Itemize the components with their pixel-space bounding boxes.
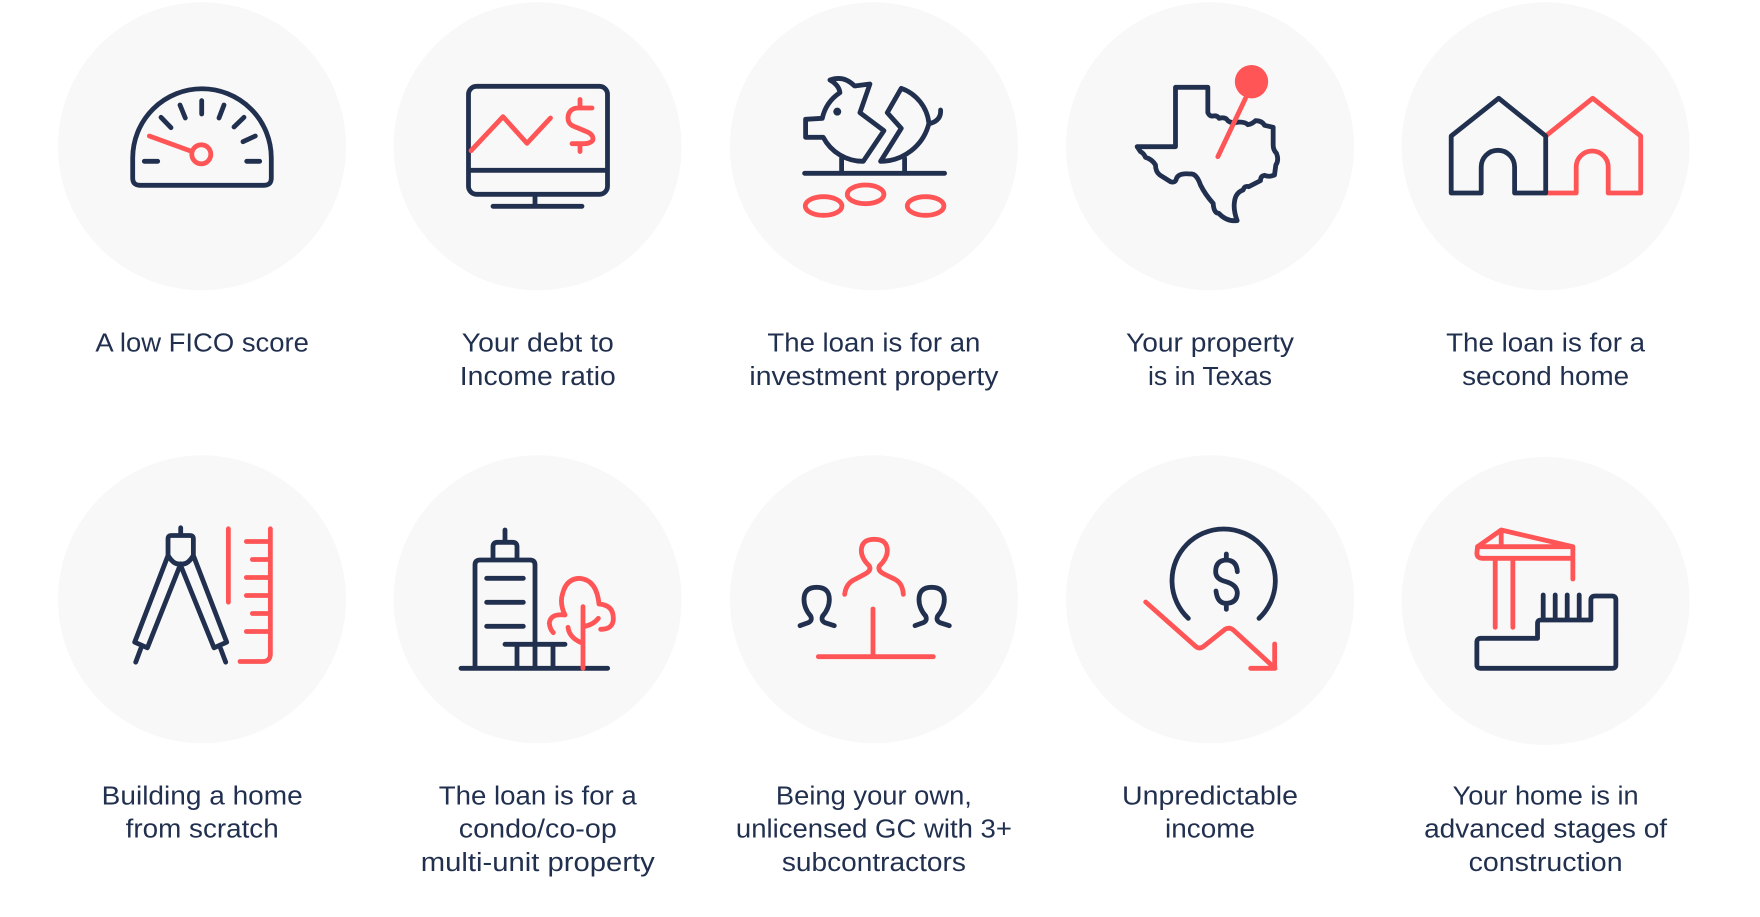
- icon: monitor with chart: [468, 86, 608, 206]
- label: Building a home: [102, 783, 303, 811]
- icon: three people: [800, 539, 949, 657]
- background circle: [58, 2, 346, 290]
- panel: advanced stages of construction: [1402, 457, 1690, 877]
- icon: broken piggy bank: [805, 78, 945, 215]
- label: [736, 783, 1012, 877]
- icon: tower and tree: [461, 530, 613, 668]
- label: multi-unit property: [421, 849, 655, 877]
- panel: low FICO score: [58, 2, 346, 358]
- label: [1446, 330, 1646, 391]
- label: Income ratio: [460, 363, 616, 391]
- panel: debt to income ratio: [394, 2, 682, 391]
- panel: investment property: [730, 2, 1018, 391]
- panel: second home: [1402, 2, 1690, 391]
- label: The loan is for a: [439, 783, 638, 811]
- label: income: [1165, 816, 1255, 844]
- label: The loan is for an: [767, 330, 980, 358]
- label: [1126, 330, 1294, 391]
- label: [460, 330, 616, 391]
- icon: crane and building: [1477, 530, 1616, 668]
- label: Unpredictable: [1122, 783, 1298, 811]
- label: A low FICO score: [95, 330, 309, 358]
- label: second home: [1462, 363, 1629, 391]
- label: [749, 330, 999, 391]
- icon: two houses: [1451, 98, 1641, 193]
- panel: property in Texas: [1066, 2, 1354, 391]
- label: Being your own,: [776, 783, 972, 811]
- background circle: [730, 2, 1018, 290]
- background circle: [1402, 2, 1690, 290]
- background circle: [394, 455, 682, 743]
- label: from scratch: [126, 816, 279, 844]
- label: [1424, 783, 1668, 877]
- panel: condo multi-unit property: [394, 455, 682, 877]
- label: investment property: [749, 363, 999, 391]
- label: Your home is in: [1453, 783, 1639, 811]
- background circle: [1066, 2, 1354, 290]
- panel: unlicensed GC: [730, 455, 1018, 877]
- label: advanced stages of: [1424, 816, 1668, 844]
- background circle: [394, 2, 682, 290]
- icon: Texas map with pin: [1137, 65, 1278, 221]
- panel: building from scratch: [58, 455, 346, 844]
- label: Your property: [1126, 330, 1294, 358]
- icon: falling income arrow: [1146, 529, 1275, 668]
- panel: unpredictable income: [1066, 455, 1354, 844]
- label: [102, 783, 303, 844]
- icon: speedometer gauge: [133, 89, 271, 185]
- label: The loan is for a: [1446, 330, 1646, 358]
- label: subcontractors: [782, 849, 966, 877]
- label: construction: [1469, 849, 1623, 877]
- label: unlicensed GC with 3+: [736, 816, 1012, 844]
- background circle: [1066, 455, 1354, 743]
- background circle: [730, 455, 1018, 743]
- icon: compass and ruler: [135, 528, 270, 662]
- label: [1122, 783, 1298, 844]
- background circle: [58, 455, 346, 743]
- label: Your debt to: [462, 330, 614, 358]
- label: is in Texas: [1148, 363, 1272, 391]
- label: [421, 783, 655, 877]
- label: condo/co-op: [459, 816, 617, 844]
- background circle: [1402, 457, 1690, 745]
